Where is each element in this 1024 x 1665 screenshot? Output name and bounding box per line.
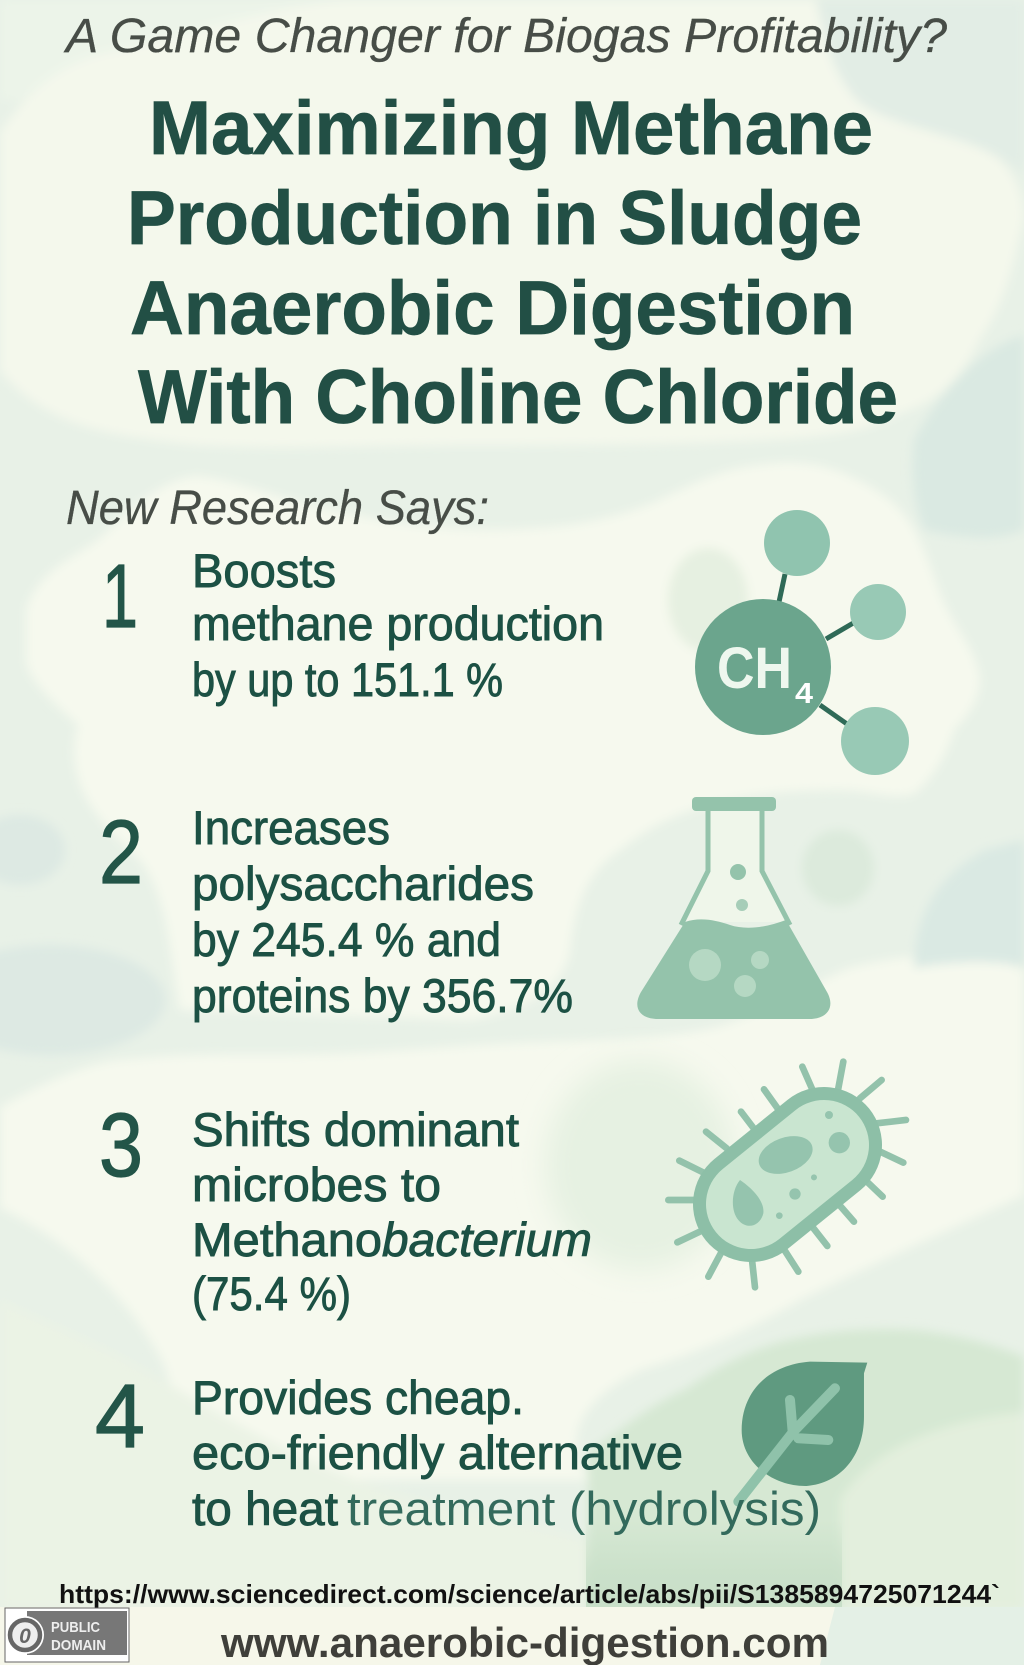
item 4 text: eco-friendly alternative [192, 1426, 683, 1479]
item 2 text [192, 801, 573, 1022]
item 4 text: to heat [192, 1482, 338, 1535]
number 3: 3 [99, 1096, 143, 1196]
icon: flask [637, 797, 830, 1019]
item 2 text: by 245.4 % and [192, 913, 501, 966]
icon: public domain badge [5, 1608, 129, 1662]
item 3 text: Shifts dominant [192, 1103, 519, 1156]
item 1 text: methane production [192, 597, 604, 650]
icon: public domain badge: 0 [19, 1625, 31, 1648]
title [127, 86, 898, 440]
item 3 text: (75.4 %) [192, 1267, 351, 1320]
item 4 text: Provides cheap. [192, 1371, 524, 1424]
item 2 [99, 801, 573, 1022]
icon: methane molecule [695, 510, 909, 775]
item 4 text [192, 1371, 821, 1535]
number 1: 1 [102, 547, 138, 647]
item 2 text: proteins by 356.7% [192, 969, 573, 1022]
icon: leaf [738, 1362, 867, 1502]
number 2: 2 [99, 803, 143, 903]
item 3 text: microbes to [192, 1158, 441, 1211]
item 3 text: Methano [192, 1213, 382, 1266]
item 1 text: by up to 151.1 % [192, 653, 503, 706]
source url: https://www.sciencedirect.com/science/article/abs/pii/S1385894725071244` [59, 1579, 1000, 1609]
subtitle: A Game Changer for Biogas Profitability? [63, 10, 947, 63]
item 1 text: Boosts [192, 544, 336, 597]
website: www.anaerobic-digestion.com [220, 1619, 829, 1665]
icon: public domain badge: PUBLIC [51, 1619, 100, 1636]
title: Anaerobic Digestion [130, 266, 855, 351]
title: Production in Sludge [127, 176, 862, 261]
item 2 text: polysaccharides [192, 857, 534, 910]
icon: methane molecule: CH [717, 636, 792, 701]
icon: public domain badge: DOMAIN [51, 1637, 106, 1654]
item 1 [102, 544, 604, 706]
title: With Choline Chloride [138, 355, 898, 440]
item 4 text: treatment (hydrolysis) [347, 1482, 821, 1535]
item 3 [99, 1096, 592, 1320]
icon: bacterium [668, 1062, 906, 1287]
item 4 [95, 1367, 821, 1535]
item 2 text: Increases [192, 801, 390, 854]
number 4: 4 [95, 1367, 145, 1467]
item 3 text [192, 1103, 592, 1320]
item 3 text: bacterium [382, 1213, 592, 1266]
section heading: New Research Says: [66, 482, 489, 535]
icon: methane molecule: 4 [795, 678, 813, 710]
title: Maximizing Methane [149, 86, 873, 171]
item 1 text [192, 544, 604, 706]
